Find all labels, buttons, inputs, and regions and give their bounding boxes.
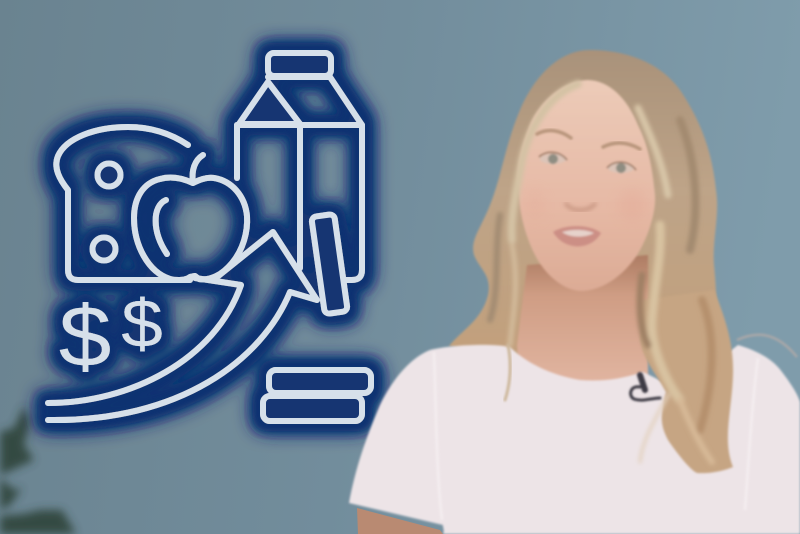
- left eye: [539, 152, 567, 164]
- icon: apple: [134, 155, 247, 280]
- mouth: [553, 226, 601, 246]
- left lock over shirt: [505, 345, 510, 400]
- stray hair on right shoulder: [737, 335, 797, 357]
- icon: rising food prices: [48, 53, 371, 421]
- icon: bread slice: [56, 127, 190, 280]
- hair behind: [449, 50, 717, 360]
- right eyebrow: [603, 143, 640, 149]
- left arm: [357, 508, 443, 534]
- lapel microphone: [631, 375, 660, 400]
- icon: tilted coin: [311, 214, 348, 314]
- t-shirt: [349, 345, 800, 534]
- front hair locks: [490, 84, 712, 462]
- icon: small dollar sign: $: [121, 286, 163, 362]
- nose: [566, 204, 595, 210]
- neck: [517, 255, 648, 388]
- face: [518, 80, 655, 291]
- cheek blush: [618, 189, 646, 221]
- icon: milk carton: [237, 53, 362, 280]
- hair over right shoulder: [640, 290, 733, 473]
- right eye: [607, 162, 636, 173]
- left eyebrow: [537, 131, 571, 138]
- plant in lower left corner: [0, 406, 76, 534]
- icon: large dollar sign: $: [59, 289, 111, 385]
- presenter: [349, 50, 800, 534]
- icon: upward arrow: [48, 232, 317, 420]
- shirt shading: [434, 352, 758, 520]
- icon: stacked coins: [263, 370, 371, 421]
